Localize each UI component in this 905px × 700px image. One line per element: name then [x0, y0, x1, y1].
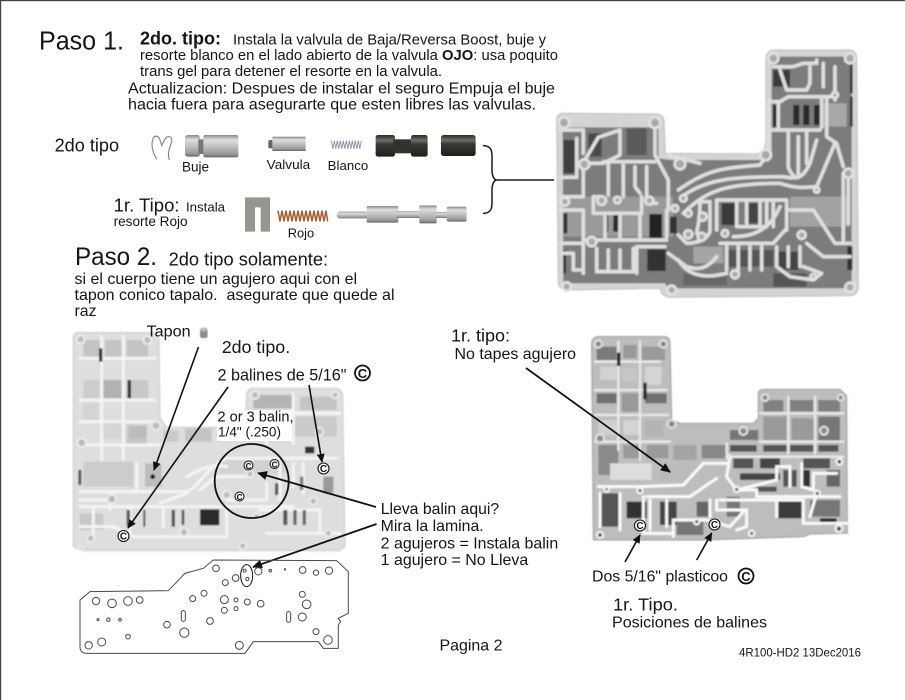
- casting walls: [595, 342, 843, 460]
- arrow: lamina to gasket: [253, 524, 376, 567]
- label: Valvula: Valvula: [267, 157, 311, 172]
- label: Buje: Buje: [182, 160, 209, 175]
- heading: Paso 2: Paso 2.: [75, 243, 157, 271]
- label: 2do tipo.: 2do tipo.: [222, 337, 290, 357]
- arrow: tapon: [154, 347, 198, 470]
- heading: Paso 1: Paso 1.: [39, 28, 124, 56]
- parts row: 2do tipo: [152, 135, 476, 160]
- label: No tapes agujero: No tapes agujero: [454, 346, 576, 363]
- panel: lower left valve body photo: [73, 333, 345, 551]
- document code: 4R100-HD2 13Dec2016: [739, 648, 861, 660]
- circle highlight: [215, 444, 289, 518]
- arrow: balin right: [309, 385, 322, 462]
- icon: black valve: [376, 135, 428, 157]
- icon: black cylinder: [441, 135, 476, 156]
- C markers on lower right plate: C: [636, 521, 644, 532]
- label: 2 balines: 2 balines de 5/16": [218, 367, 347, 385]
- C markers on lower left plate: C: [120, 532, 127, 542]
- text block: Paso 1 instructions: 2do. tipo:: [140, 28, 221, 48]
- white callout box: [217, 410, 292, 441]
- C markers on lower right plate: C: [711, 520, 718, 531]
- diagram: gasket outline: [80, 560, 348, 653]
- C markers on lower left plate: C: [246, 462, 252, 471]
- icon: white spring: [331, 141, 361, 149]
- icon: valvula: [268, 137, 306, 151]
- label: Dos 5/16 plasticoo: Dos 5/16" plasticoo: [592, 569, 728, 586]
- icon: C mark: C: [358, 366, 368, 381]
- label: 1r. Tipo: 1r. Tipo:: [114, 195, 180, 215]
- icon: tapon plug: [200, 328, 208, 338]
- text block: Lleva balin: Lleva balin aqui?: [381, 501, 499, 518]
- label: Tapon: Tapon: [147, 324, 191, 341]
- C markers on lower left plate: C: [237, 493, 243, 502]
- arrow: no tapes agujero: [526, 368, 670, 472]
- casting walls: [80, 337, 340, 540]
- C markers on lower right plate: [634, 519, 720, 532]
- label: 1r. tipo: 1r. tipo:: [451, 326, 510, 346]
- panel: lower right valve body photo: [592, 337, 847, 540]
- icon: buje sleeve: [185, 135, 238, 157]
- icon: retaining clip: [152, 136, 172, 160]
- dark details: [78, 348, 333, 527]
- parts row: 1r tipo: [245, 197, 467, 232]
- bosses: [597, 455, 842, 538]
- shaded pockets: [597, 345, 840, 535]
- label: 2do tipo: 2do tipo: [55, 136, 119, 156]
- arrow: balin left: [128, 387, 228, 528]
- page number: Pagina 2: [440, 638, 503, 655]
- text block: Lleva balin: 2 agujeros = Instala balin: [381, 535, 558, 552]
- panel: top valve body photo: [557, 50, 858, 297]
- icon: C mark: [738, 568, 754, 584]
- text block: Paso 1 instructions: Actualizacion: Despues de instalar el seguro Empuja el buje: [128, 81, 555, 98]
- arrow: balin position 2: [697, 533, 712, 560]
- label: 1r. Tipo: [114, 195, 226, 229]
- icon: C mark: [355, 366, 370, 381]
- text block: Lleva balin: 1 agujero = No Lleva: [381, 552, 528, 569]
- bosses: [559, 53, 855, 294]
- plate body: [557, 50, 858, 297]
- label: Posiciones de balines: Posiciones de balines: [612, 615, 767, 632]
- bracket connector: [483, 146, 554, 214]
- text block: Lleva balin: [381, 501, 558, 569]
- text block: Paso 1 instructions: [128, 28, 558, 114]
- arrow: balin position 1: [625, 535, 640, 562]
- shaded pockets: [80, 340, 337, 530]
- text block: Paso 1 instructions: Instala la valvula de Baja/Reversa Boost, buje y: [233, 32, 547, 48]
- icon: slotted plate: [245, 197, 270, 232]
- icon: long valve: [337, 205, 467, 223]
- C markers on lower left plate: C: [320, 464, 327, 475]
- label: 1r. Tipo: Instala: [186, 200, 226, 215]
- text block: Paso 2 instructions: si el cuerpo tiene un agujero aqui con el: [74, 271, 357, 288]
- text block: Paso 1 instructions: trans gel para detener el resorte en la valvula.: [140, 63, 442, 80]
- text block: Lleva balin: Mira la lamina.: [381, 518, 484, 535]
- casting walls: [560, 60, 850, 280]
- text block: Paso 2 instructions: [74, 271, 394, 320]
- label: 1r. Tipo: resorte Rojo: [114, 214, 188, 229]
- C markers on lower left plate: [118, 460, 329, 542]
- icon: C mark: C: [741, 569, 751, 584]
- label: 2 or 3 balin: [218, 410, 294, 440]
- bosses: [77, 335, 338, 550]
- text block: Paso 2 instructions: tapon conico tapalo. asegurate que quede al: [74, 287, 394, 304]
- C markers on lower left plate: C: [272, 460, 278, 470]
- icon: red spring: [278, 211, 328, 221]
- label: Blanco: Blanco: [328, 158, 368, 173]
- label: Rojo: Rojo: [288, 226, 314, 240]
- arrow: lleva balin to body: [258, 473, 376, 507]
- plate body: [73, 333, 345, 551]
- text block: Paso 1 instructions: resorte blanco en el lado abierto de la valvula OJO: usa poquito: [140, 47, 558, 64]
- heading: 1r. Tipo: 1r. Tipo.: [613, 595, 678, 615]
- text block: Paso 1 instructions: hacia fuera para asegurarte que esten libres las valvulas.: [128, 96, 536, 114]
- dark slots: [617, 353, 670, 472]
- text block: Paso 2 instructions: raz: [74, 303, 96, 320]
- label: 2 or 3 balin: 2 or 3 balin,: [218, 410, 294, 426]
- subheading: 2do tipo solamente: 2do tipo solamente:: [169, 249, 328, 270]
- plate body: [592, 337, 847, 540]
- label: 2 or 3 balin: 1/4" (.250): [218, 425, 281, 440]
- pockets: [563, 57, 853, 288]
